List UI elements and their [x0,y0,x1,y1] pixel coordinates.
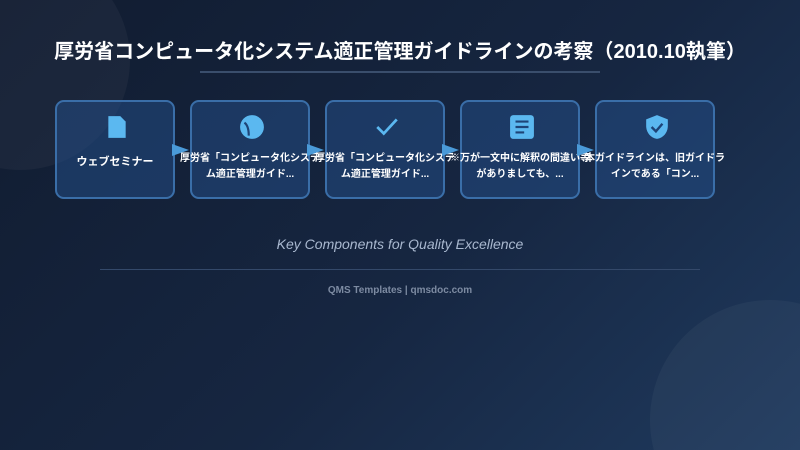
footer: QMS Templates | qmsdoc.com [328,285,472,296]
card 3: 厚労省「コンピュータ化システ [315,153,455,164]
card 1 [55,100,175,199]
icon: document [108,116,126,138]
card 4: がありましても、... [476,169,564,180]
title: 厚労省コンピュータ化システム適正管理ガイドラインの考察（2010.10執筆） [54,41,746,63]
card 1: ウェブセミナー [76,156,154,168]
icon: shield [646,115,668,139]
card 2: ム適正管理ガイド... [206,169,294,180]
card 2: 厚労省「コンピュータ化システ [180,153,320,164]
icon: globe [240,115,264,139]
card 5: 本ガイドラインは、旧ガイドラ [585,153,725,164]
subtitle: Key Components for Quality Excellence [277,236,523,252]
icon: check [376,118,398,136]
card 3 [325,100,445,199]
arrow 4 [577,144,594,156]
arrow 2 [307,144,324,156]
card 5: インである「コン... [611,169,699,180]
card 3: ム適正管理ガイド... [341,169,429,180]
card 4 [460,100,580,199]
icon: article [510,115,534,139]
card 5 [595,100,715,199]
arrow 3 [442,144,459,156]
card 2 [190,100,310,199]
arrow 1 [172,144,189,156]
card 4: ※万が一文中に解釈の間違い等 [450,153,590,164]
